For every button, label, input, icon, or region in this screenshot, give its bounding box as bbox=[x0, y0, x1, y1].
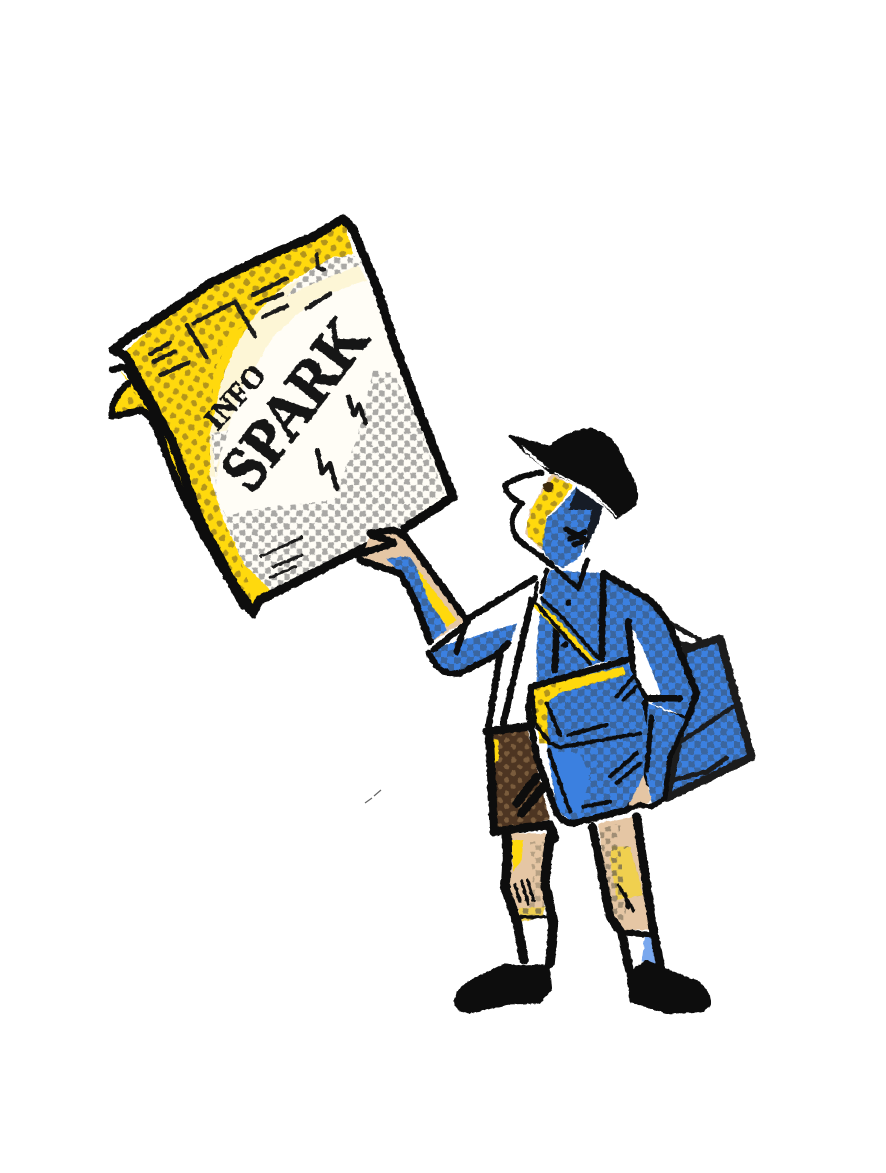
back satchel bbox=[667, 623, 752, 798]
small ink mark bbox=[365, 790, 381, 803]
gray halftone left edge bbox=[212, 430, 228, 517]
right shoe bbox=[629, 963, 708, 1011]
shorts bbox=[487, 727, 555, 838]
gray halftone lower area bbox=[223, 370, 443, 590]
title: INFO: INFO bbox=[197, 358, 273, 436]
left shoe bbox=[457, 966, 549, 1011]
figure: upper body bbox=[357, 429, 752, 838]
figure: legs and shoes bbox=[457, 817, 708, 1011]
paper outline bbox=[113, 218, 453, 612]
front satchel bbox=[528, 660, 652, 823]
masthead box and headline strokes bbox=[150, 255, 330, 375]
face and neck bbox=[505, 473, 603, 568]
right leg bbox=[593, 817, 661, 970]
title: SPARK: SPARK bbox=[206, 304, 383, 504]
left leg bbox=[505, 830, 553, 963]
pale yellow band bbox=[210, 252, 367, 477]
torso outlines bbox=[488, 573, 697, 728]
cap bbox=[510, 429, 636, 517]
gray halftone upper area bbox=[287, 255, 363, 297]
raised arm sleeve bbox=[428, 578, 535, 674]
front page sheet bbox=[123, 218, 453, 610]
lower arm and hand at bag bbox=[628, 703, 688, 808]
shirt torso bbox=[537, 570, 697, 717]
yellow halftone corner bbox=[123, 218, 353, 610]
shoulder strap bbox=[533, 583, 598, 663]
footer text lines bbox=[261, 537, 302, 577]
back pages bbox=[112, 367, 257, 617]
lightning bolts bbox=[317, 397, 366, 488]
white gap at arm bbox=[625, 623, 661, 712]
white shirt panel bbox=[507, 603, 540, 725]
shirt buttons and collar bbox=[542, 560, 587, 648]
newspaper bbox=[112, 218, 453, 617]
raised forearm and hand bbox=[357, 530, 467, 642]
